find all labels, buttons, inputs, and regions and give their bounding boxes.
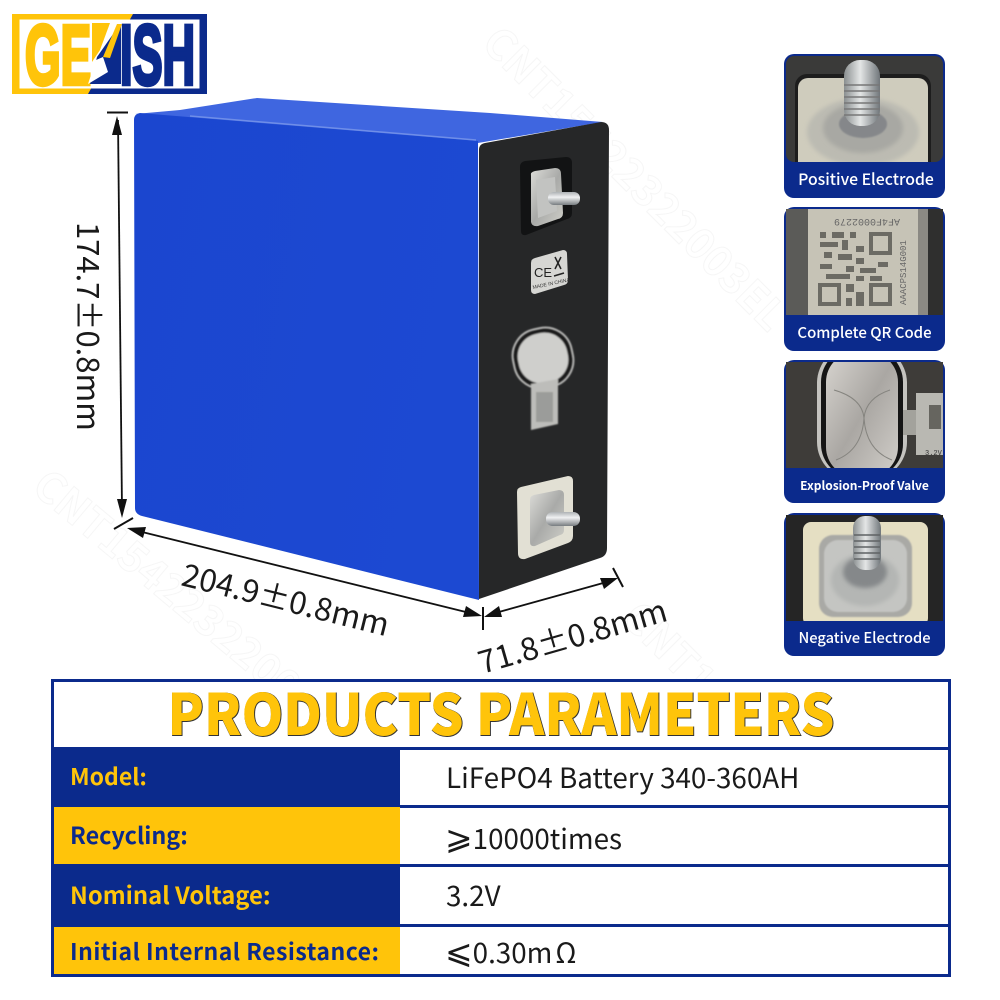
- row: model: [53, 747, 799, 807]
- row: internal resistance: ⩽0.30mΩ: [445, 925, 576, 973]
- photo: valve: [786, 362, 943, 468]
- card: QR code: [784, 207, 945, 351]
- photo: valve: 3.2V: [925, 450, 943, 458]
- dimension: length: [127, 527, 483, 646]
- CE label: CE: [534, 265, 552, 280]
- positive terminal: [520, 157, 580, 235]
- row: nominal voltage: [53, 864, 501, 927]
- photo: QR code: AAACPS14G001: [899, 240, 909, 305]
- watermark: CNT15422322003EL YER: [22, 453, 441, 819]
- card: valve: [784, 345, 945, 503]
- row: nominal voltage: Nominal Voltage:: [70, 876, 271, 911]
- caption: Negative Electrode: [798, 627, 931, 648]
- row: internal resistance: [54, 925, 576, 974]
- title: PRODUCTS PARAMETERS: [168, 670, 834, 752]
- row: recycling: [54, 807, 622, 864]
- logo: ISH: [120, 9, 195, 103]
- dimension: height: 174.7±0.8mm: [68, 222, 113, 431]
- dimension: length: 204.9±0.8mm: [178, 550, 395, 646]
- CE label: MADE IN CHINA: [532, 277, 571, 291]
- card: negative electrode: [784, 513, 945, 656]
- photo: positive electrode: [786, 56, 943, 162]
- logo: GE: [25, 9, 91, 103]
- logo: [12, 9, 207, 103]
- battery end face: [479, 122, 609, 599]
- card: positive electrode: [784, 54, 945, 198]
- parameters table: [52, 670, 951, 976]
- battery top face: [135, 98, 603, 143]
- table frame: [52, 680, 950, 976]
- row: model: LiFePO4 Battery 340-360AH: [446, 757, 799, 797]
- caption: Complete QR Code: [797, 322, 932, 343]
- photo: QR code: [786, 209, 943, 315]
- caption: Positive Electrode: [798, 167, 934, 190]
- caption: Explosion-Proof Valve: [800, 477, 929, 494]
- row: recycling: ⩾10000times: [445, 811, 622, 859]
- row: nominal voltage: 3.2V: [446, 875, 501, 915]
- battery: [134, 98, 609, 600]
- photo: negative electrode: [786, 515, 943, 626]
- row: internal resistance: Initial Internal Resistance:: [70, 933, 379, 967]
- CE label: [531, 250, 571, 294]
- title: PRODUCTS PARAMETERS: [168, 670, 835, 752]
- row: model: Model:: [70, 758, 147, 792]
- battery side face: [134, 113, 479, 600]
- dimension: height: [68, 112, 133, 529]
- negative terminal: [517, 476, 580, 559]
- row: recycling: Recycling:: [70, 817, 188, 851]
- watermark: CNT15422322003EL: [471, 11, 802, 343]
- watermark: CNT15422322003EL: [611, 586, 942, 918]
- photo: QR code: AF4F0002279: [834, 215, 900, 226]
- dimension: width: 71.8±0.8mm: [472, 586, 672, 684]
- explosion-proof valve: [507, 322, 579, 430]
